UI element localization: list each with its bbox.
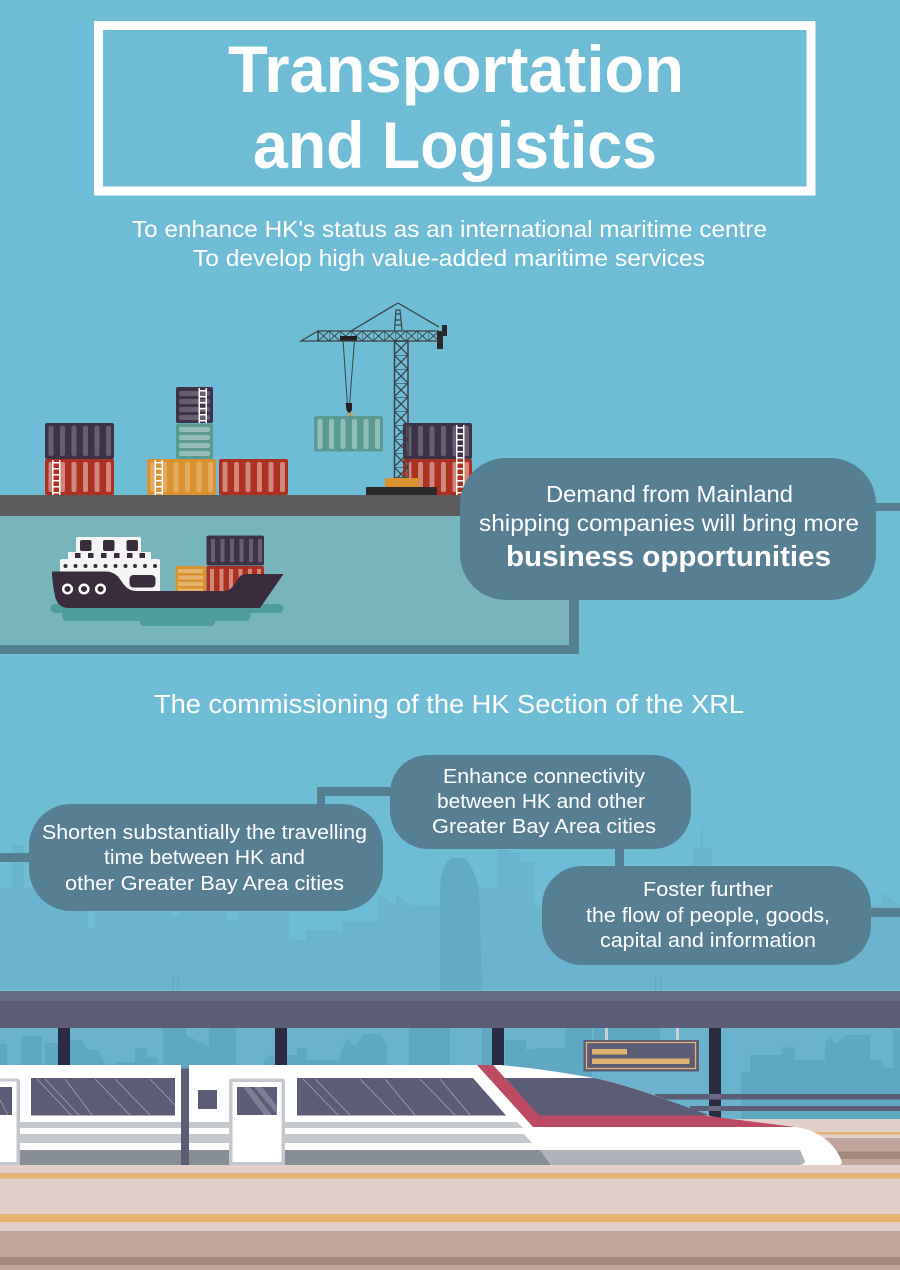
title box: [98, 26, 811, 191]
callout: shorten travelling time: [29, 804, 383, 911]
skyline: upper city silhouette: [0, 828, 900, 991]
title: and Logistics: [253, 108, 657, 182]
containers: middle stack: [147, 387, 216, 495]
hanging container: [314, 416, 383, 452]
callout: shorten travelling time: time between HK and: [104, 846, 305, 869]
ship: [50, 536, 284, 626]
station roof: [0, 991, 900, 1028]
subtitle: [132, 216, 767, 271]
callout: business opportunities: shipping companies will bring more: [479, 510, 859, 536]
callout: shorten travelling time: Shorten substantially the travelling: [42, 821, 367, 844]
connectors between XRL callouts: [0, 787, 900, 917]
callout: enhance connectivity: between HK and other: [437, 790, 645, 813]
callout: enhance connectivity: Enhance connectivity: [443, 765, 646, 788]
subtitle: To enhance HK's status as an international maritime centre: [132, 216, 767, 242]
callout: foster further: [542, 866, 871, 965]
doors: [0, 1078, 20, 1165]
train side windows: [0, 1078, 506, 1116]
dock: [0, 495, 480, 516]
window glints: [0, 1079, 470, 1115]
title: Transportation: [228, 32, 684, 106]
crane: [301, 303, 447, 495]
roof columns: [58, 1028, 721, 1118]
callout: foster further: Foster further: [643, 878, 773, 901]
title: [228, 32, 684, 182]
callout: business opportunities: Demand from Mainland: [546, 481, 793, 507]
container: red: [219, 459, 288, 495]
far platform: [730, 1119, 900, 1165]
callout: enhance connectivity: Greater Bay Area cities: [432, 815, 656, 838]
callout: shorten travelling time: other Greater Bay Area cities: [65, 872, 344, 895]
body stripes: [20, 1122, 532, 1143]
containers: right stack: [403, 423, 472, 495]
connector: business callout: [870, 503, 900, 511]
car gap: [181, 1065, 189, 1165]
train: [0, 1065, 842, 1165]
callout: foster further: the flow of people, goods,: [586, 904, 830, 927]
station sign: [584, 1028, 699, 1072]
platform: [0, 1165, 900, 1270]
callout: business opportunities: business opportunities: [506, 541, 831, 573]
red band and windshield: [477, 1065, 795, 1127]
lower skyline behind train: [0, 1028, 900, 1128]
rails: [655, 1094, 900, 1111]
subtitle: To develop high value-added maritime services: [193, 245, 705, 271]
water panel: [0, 515, 574, 650]
heading: XRL: The commissioning of the HK Section of the XRL: [154, 691, 744, 719]
callout: foster further: capital and information: [600, 929, 816, 952]
callout: enhance connectivity: [390, 755, 691, 849]
callout: business opportunities: [460, 458, 876, 600]
containers: left stack: [45, 423, 114, 495]
